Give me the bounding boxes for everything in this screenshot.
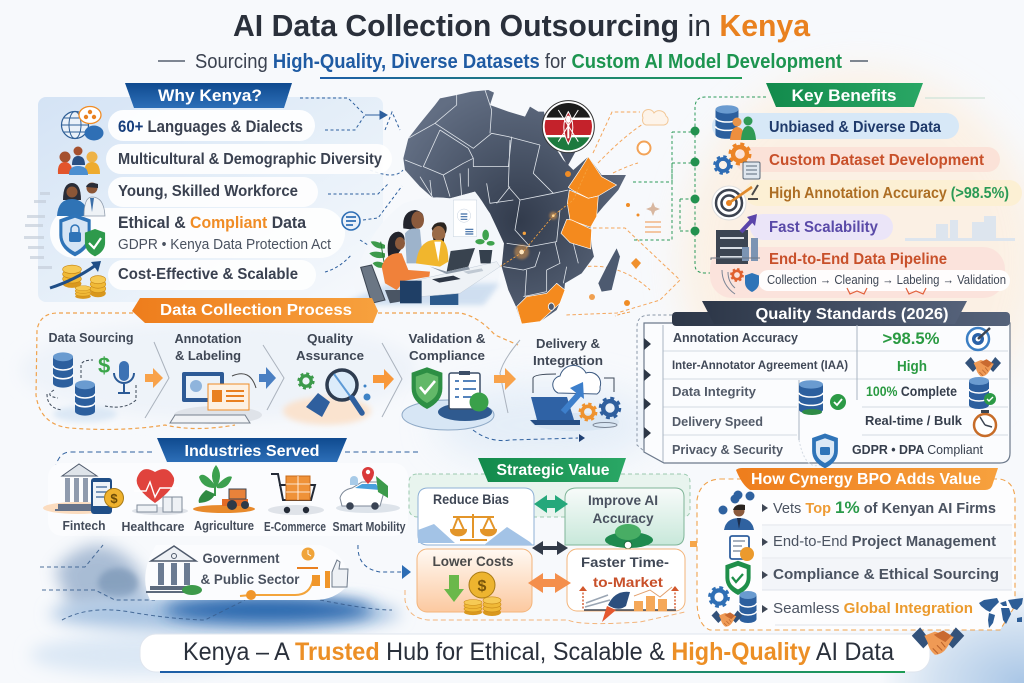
card: Reduce Bias: Reduce Bias: [433, 491, 509, 507]
title: AI Data Collection Outsourcing in Kenya: [233, 8, 811, 43]
icon: validation: [402, 367, 494, 430]
icon: data sourcing: [47, 352, 136, 422]
banner: closing statement: [140, 634, 930, 673]
labels column: [672, 330, 848, 457]
icon: shield: [812, 433, 838, 468]
icon: servers with chart: [711, 214, 760, 264]
ribbon: Quality Standards: Quality Standards (2026): [756, 306, 948, 323]
ribbon: Key Benefits: Key Benefits: [792, 86, 896, 105]
icon: shopping cart: [268, 474, 324, 515]
orange process line: [240, 580, 313, 596]
icon: target with dart: [712, 185, 758, 220]
government card: & Public Sector: [200, 572, 300, 587]
step labels: Delivery &: [536, 336, 600, 351]
icon: banner handshake: [912, 627, 964, 655]
subtitle: Sourcing High-Quality, Diverse Datasets for Custom AI Model Development: [195, 51, 842, 73]
chair: [361, 265, 385, 303]
icon: healthcare: [132, 469, 188, 515]
table body: [644, 323, 1010, 463]
pipeline steps: Collection → Cleaning → Labeling → Validation: [767, 273, 1006, 287]
benefit: custom dataset: Custom Dataset Development: [769, 152, 984, 169]
orange link to quality table: [615, 312, 630, 316]
values column: Real-time / Bulk: [865, 413, 963, 428]
icon: delivery: [530, 365, 620, 431]
step labels: Data Sourcing: [48, 330, 134, 345]
orange dashed base: [405, 590, 685, 624]
data route: [500, 167, 588, 267]
card: Reduce Bias: [418, 488, 534, 545]
benefit: annotation accuracy: High Annotation Accuracy (>98.5%): [769, 185, 1009, 202]
card: Faster Time-to-Market: Faster Time-: [581, 554, 669, 570]
icon: gears with form: [714, 144, 760, 179]
icon: quality assurance: [283, 370, 371, 425]
green backdrop: [409, 474, 690, 517]
header bar: [672, 312, 1010, 326]
ribbon: Quality Standards: [702, 301, 967, 324]
dashed header line: [56, 452, 420, 465]
faint data dashes: [24, 192, 52, 269]
text: Young workforce: Young, Skilled Workforce: [118, 183, 298, 200]
desk: [403, 262, 500, 305]
icon: database with people: [716, 105, 756, 140]
text: Ethical and compliant: Ethical & Compliant Data: [118, 214, 307, 232]
icon: compliance shield: [725, 561, 751, 595]
benefit: annotation accuracy: [745, 180, 1022, 206]
green connector bus: [633, 97, 766, 273]
industry labels: Fintech: [62, 518, 106, 533]
values column: High: [897, 358, 927, 375]
doc bubble icon: [342, 212, 360, 230]
icon: handshake: [965, 357, 1001, 376]
standing colleague: [403, 210, 424, 263]
icon: fintech: [43, 464, 124, 514]
connectors: [300, 98, 403, 272]
icon: thumbs up: [325, 560, 348, 588]
Madagascar: [598, 248, 620, 292]
panel: Data Collection Process: [36, 298, 620, 442]
panel: Key Benefits: [633, 83, 1022, 298]
icon: target: [967, 328, 990, 350]
benefit: custom dataset: [735, 147, 1000, 172]
step labels: Validation &: [408, 331, 486, 346]
office scene: [343, 192, 503, 305]
ribbon: Strategic Value: Strategic Value: [496, 462, 610, 479]
laptop: [447, 248, 475, 272]
sea and clouds backdrop: [50, 545, 400, 632]
icon: coins with growth arrow: [50, 261, 106, 299]
row separators: [762, 525, 1012, 625]
seated man: [416, 222, 448, 267]
icon: world map: [979, 598, 1023, 628]
benefit: pipeline: End-to-End Data Pipeline: [769, 251, 947, 268]
country borders: [405, 90, 578, 297]
industry labels: [62, 518, 406, 534]
icon: gear, database and handshake: [710, 588, 756, 627]
labels column: Inter-Annotator Agreement (IAA): [672, 358, 848, 372]
labels column: Privacy & Security: [672, 442, 784, 457]
table: Quality Standards: [637, 301, 1010, 468]
row text: Vets Top 1% of Kenyan AI Firms: [773, 498, 996, 517]
panel body: [697, 479, 1015, 630]
arrow: green double: [534, 495, 568, 513]
dashed strands: [40, 545, 392, 620]
benefit: pipeline: [710, 247, 1010, 298]
arrow: step 3 to 4: [373, 369, 394, 390]
potted plant: [475, 230, 495, 263]
ribbon: Cynergy: How Cynergy BPO Adds Value: [751, 471, 981, 488]
benefit: unbiased: [712, 113, 959, 139]
step labels: Compliance: [409, 348, 485, 363]
panel: How Cynergy BPO Adds Value: [697, 468, 1023, 630]
icon: diverse people: [58, 146, 100, 175]
icon: scales: [451, 514, 496, 540]
icon: agriculture: [193, 465, 255, 513]
ribbon: Strategic Value: [478, 458, 626, 482]
arrow to Cynergy panel: [690, 534, 714, 554]
arrow: step 2 to 3: [259, 367, 276, 389]
labels column: Annotation Accuracy: [673, 330, 799, 345]
step labels: Integration: [533, 353, 603, 368]
benefit: scalability: Fast Scalability: [769, 219, 878, 236]
glowing nodes: [514, 212, 557, 259]
government card: [145, 545, 348, 600]
arrow: orange double: [528, 573, 571, 593]
Lesotho: [548, 303, 554, 310]
text: Multicultural: Multicultural & Demographic Diversity: [118, 151, 382, 168]
icon: project document: [730, 536, 754, 561]
icon: database small: [969, 377, 996, 409]
highlighted countries: [517, 157, 617, 324]
icon: vetted expert with stars: [718, 490, 754, 530]
icon: pipeline gear and shield: [722, 269, 759, 294]
icon: annotation: [170, 372, 262, 424]
step labels: & Labeling: [175, 348, 241, 363]
step labels: Assurance: [296, 348, 364, 363]
pipeline steps: [758, 270, 1010, 291]
row pills: [50, 110, 392, 290]
ribbon: Cynergy: [736, 468, 998, 490]
grid: [663, 325, 1008, 466]
step labels: Quality: [307, 331, 354, 346]
step labels: Annotation: [174, 331, 242, 346]
icon: fintech: $: [110, 491, 118, 506]
values column: [852, 329, 983, 457]
icon: database check: [799, 380, 846, 415]
row text: [773, 498, 999, 617]
step labels: [48, 330, 603, 368]
panel: Strategic Value: [405, 458, 690, 624]
continent silhouette: [403, 90, 626, 324]
Kenya flag pin: [542, 101, 594, 177]
icon: shield check: [59, 214, 105, 256]
dashed frame: [637, 315, 672, 452]
text: GDPR: GDPR • Kenya Data Protection Act: [118, 237, 331, 253]
card: Faster Time-to-Market: [567, 549, 685, 622]
benefit: unbiased: Unbiased & Diverse Data: [769, 119, 941, 136]
industry labels: Smart Mobility: [332, 519, 406, 534]
values column: GDPR • DPA Compliant: [852, 442, 983, 457]
card: Improve AI Accuracy: [565, 488, 684, 549]
ribbon: Why Kenya: [125, 83, 292, 108]
arrow to strategic value: [358, 545, 411, 579]
icon: globe with speech bubbles: [62, 106, 104, 140]
labels column: Delivery Speed: [672, 414, 763, 429]
panel: Why Kenya: [24, 83, 403, 299]
industry labels: E-Commerce: [264, 519, 326, 534]
connector arrowhead: [365, 111, 387, 119]
icon row backdrop: [48, 463, 408, 536]
benefit: scalability: [750, 214, 893, 240]
icon: government building: [146, 546, 202, 595]
Africa map: [343, 90, 626, 324]
icon: stopwatch: [974, 410, 996, 436]
ribbon: Key Benefits: [766, 83, 985, 107]
row markers: [644, 338, 651, 439]
values column: >98.5%: [882, 329, 940, 348]
row bullets: [762, 504, 768, 613]
row text: Seamless Global Integration: [773, 601, 973, 617]
peach dashed decoration east of map: [565, 112, 680, 315]
values column: 100% Complete: [866, 384, 957, 399]
seated woman: [382, 232, 430, 303]
arrow: step 4 to 5: [494, 368, 516, 390]
icon: rocket and bars: [579, 586, 679, 622]
ribbon: Industries Served: Industries Served: [184, 443, 320, 460]
industry labels: Agriculture: [194, 518, 254, 533]
decorative right icons: [589, 109, 668, 306]
text: Cost-effective: Cost-Effective & Scalable: [118, 266, 298, 283]
dashed outline: [36, 313, 518, 429]
skyline decoration: [905, 216, 1015, 241]
screen glyphs: [461, 214, 473, 234]
icon: data sourcing: $: [98, 353, 110, 378]
government card: Government: [202, 551, 280, 566]
card: Lower Costs: [417, 549, 532, 616]
labels column: Data Integrity: [672, 384, 757, 399]
arrow: step 1 to 2: [145, 368, 163, 388]
card: Improve AI Accuracy: Improve AI: [588, 492, 658, 508]
icon: young workforce: [57, 182, 105, 216]
industry labels: Healthcare: [122, 519, 184, 534]
card: Improve AI Accuracy: Accuracy: [592, 510, 654, 526]
node on line: [246, 590, 256, 600]
icon: seal stamp: [297, 548, 320, 586]
ribbon: Industries Served: [157, 438, 347, 462]
chevron separators: [145, 340, 520, 418]
row text: End-to-End Project Management: [773, 534, 996, 550]
left plant: [369, 241, 385, 268]
card: Lower Costs: Lower Costs: [432, 553, 514, 569]
connector nodes: [690, 126, 700, 236]
arrow: dark double: [532, 541, 568, 555]
tablet and papers: [432, 276, 461, 283]
icon: brain chip: [605, 524, 653, 549]
ribbon: Data Collection Process: Data Collection Process: [160, 302, 352, 319]
text: 60+ Languages: 60+ Languages & Dialects: [118, 117, 303, 136]
card: Faster Time-to-Market: to-Market: [593, 574, 663, 590]
panel: Industries Served: [40, 438, 420, 632]
ribbon: Why Kenya: Why Kenya?: [158, 86, 262, 105]
row text: Compliance & Ethical Sourcing: [773, 567, 999, 583]
ribbon: Data Collection Process: [132, 298, 378, 323]
icon: down arrow with coins: $: [478, 578, 487, 595]
dashed link to delivery: [473, 430, 578, 441]
banner: closing statement: Kenya – A Trusted Hub for Ethical, Scalable & High-Quality AI Data: [183, 638, 894, 666]
screens behind the team: [453, 200, 477, 237]
icon: smart mobility: [336, 467, 400, 513]
scene backdrop: [353, 192, 503, 305]
